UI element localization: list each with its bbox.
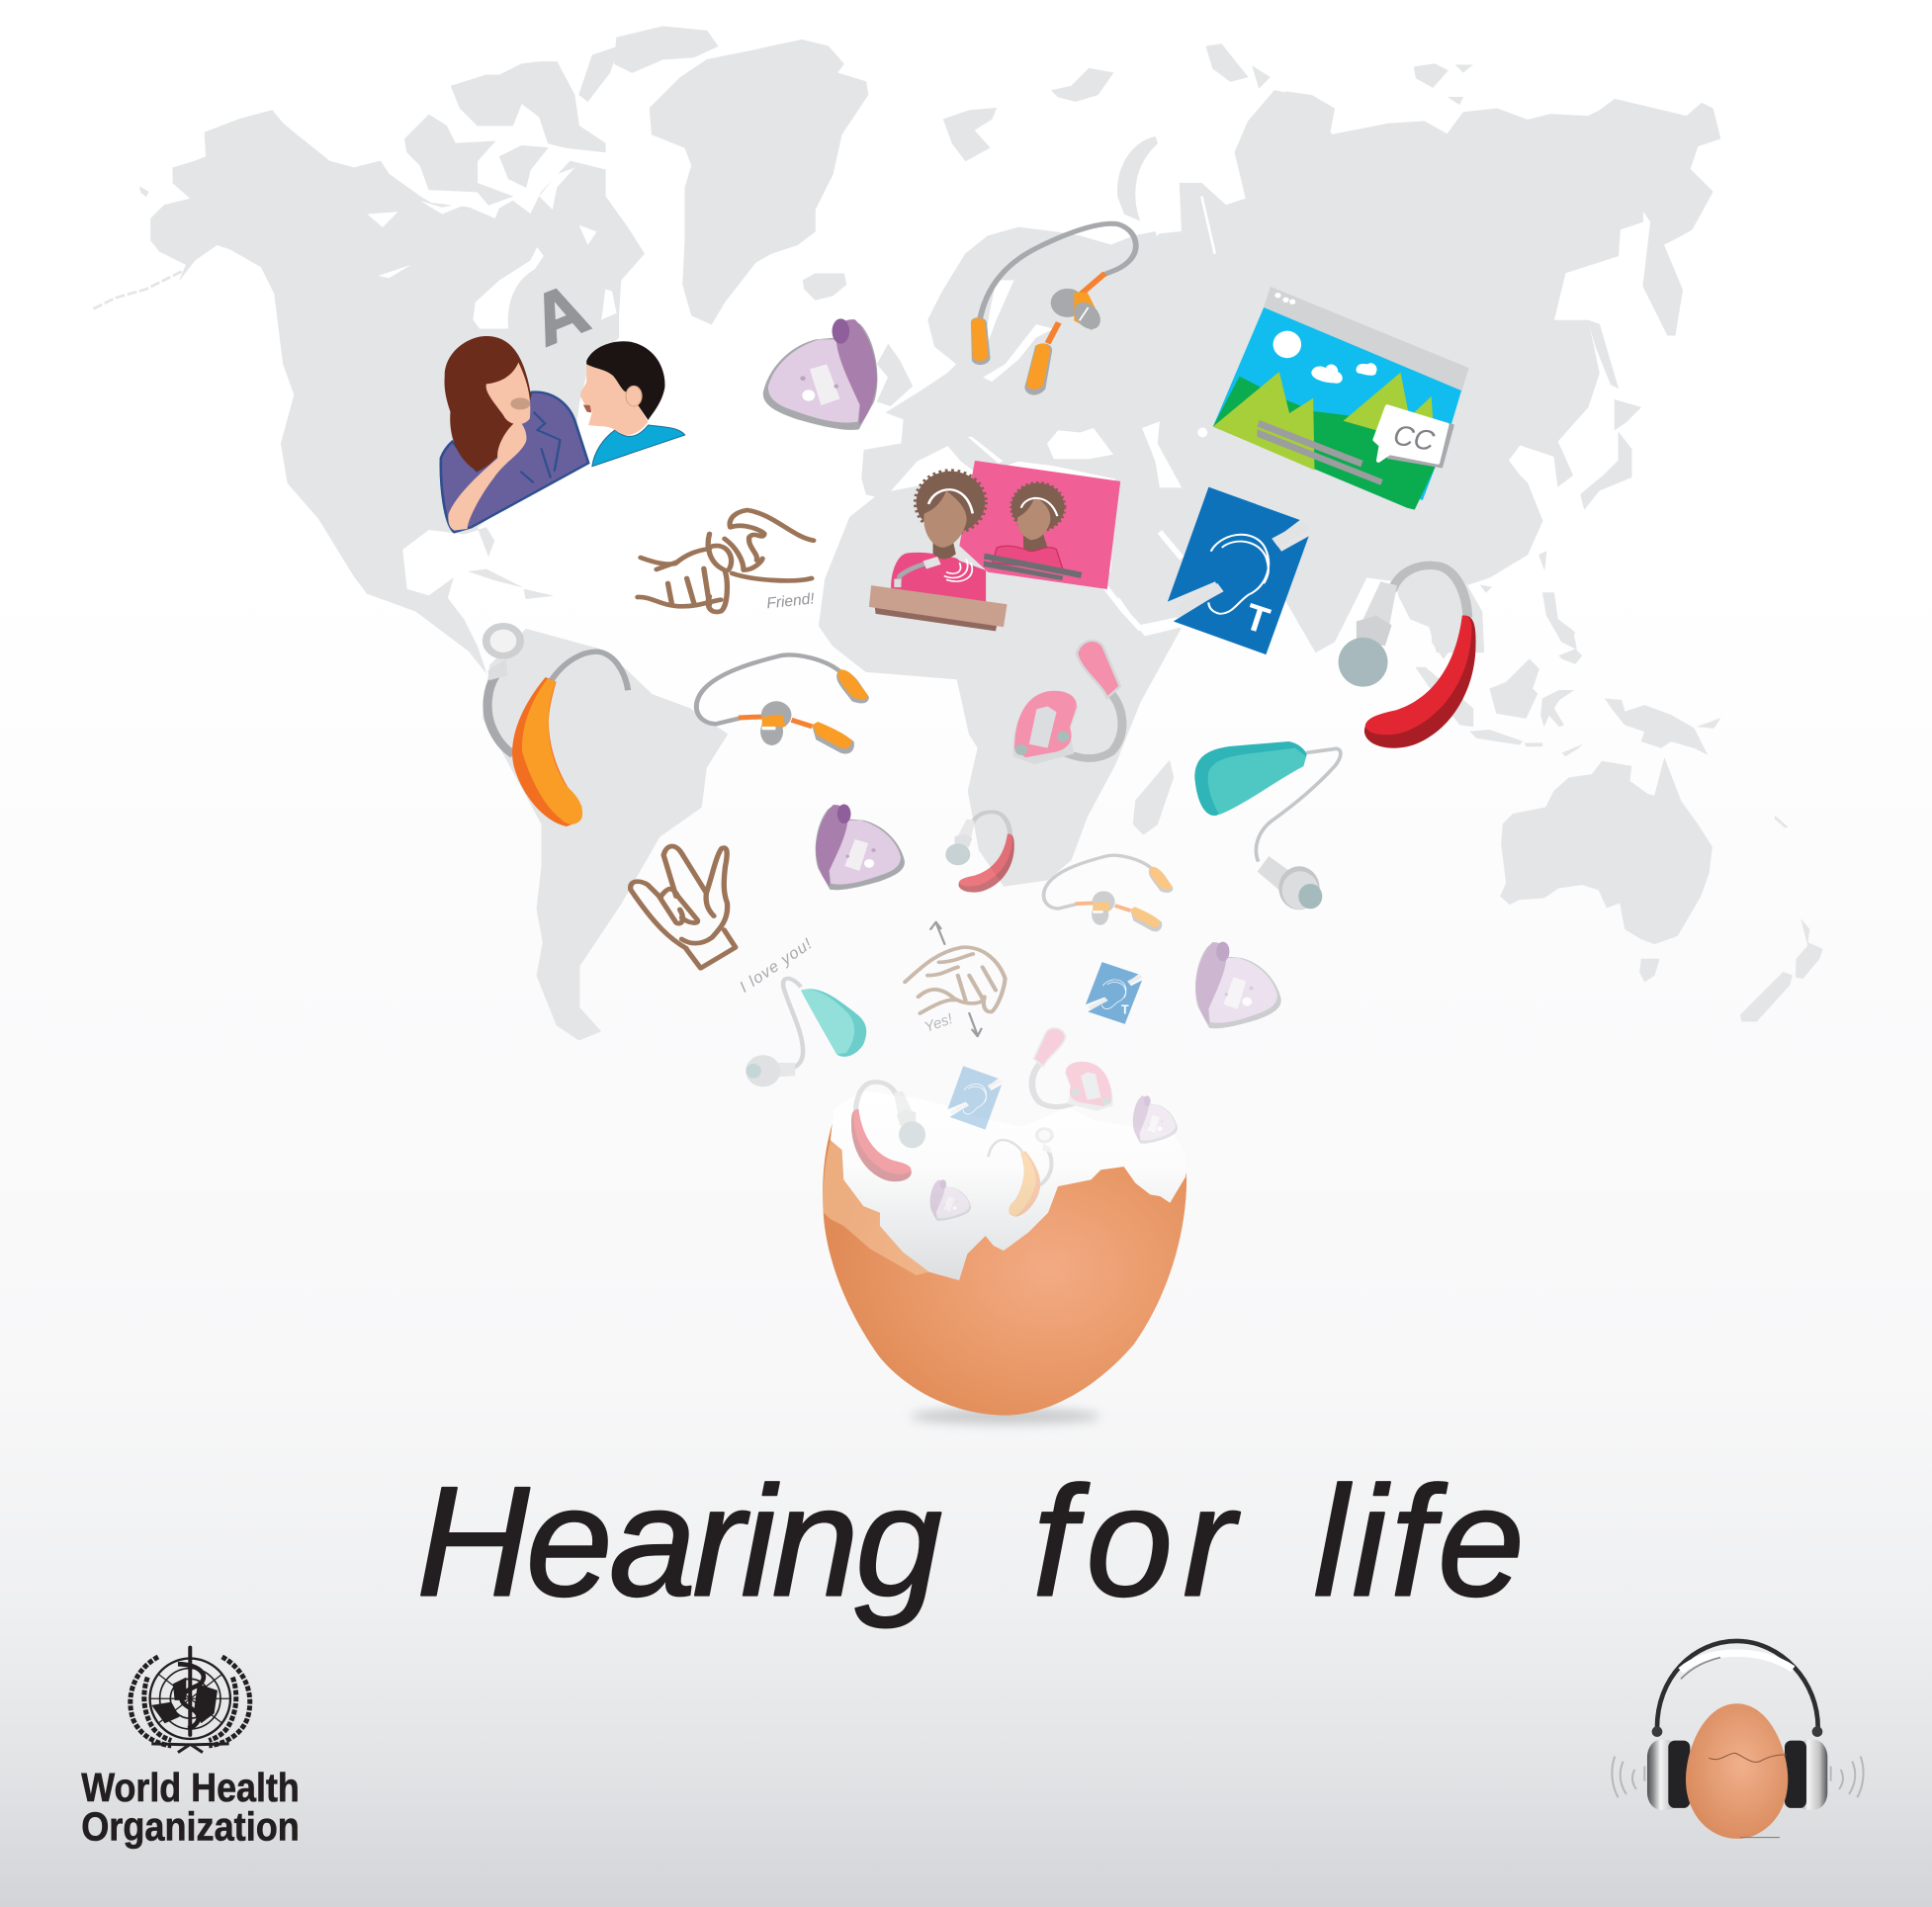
text: World Health Organization: World Health — [81, 1765, 300, 1810]
sound waves — [1612, 1757, 1864, 1797]
map: Africa — [820, 482, 1181, 886]
icon: pink behind-the-ear aid — [1013, 641, 1122, 764]
icon group: hearing-loss communication — [441, 269, 685, 532]
emblem — [131, 1648, 250, 1753]
icon: sign language 'Yes' fist — [905, 922, 1006, 1036]
icon: faded red aid over Africa — [945, 812, 1014, 893]
map: East Asia — [1209, 64, 1720, 652]
world map — [93, 27, 1822, 1040]
icon: egg shell — [823, 1090, 1186, 1425]
egg lower shell — [823, 1124, 1186, 1416]
WHO logo — [81, 1648, 300, 1850]
title: Hearing — [416, 1454, 941, 1629]
text: Yes!: Yes! — [922, 1010, 955, 1036]
icon: faded teal aid — [746, 979, 866, 1086]
text: CC: CC — [1391, 419, 1437, 458]
headband — [1657, 1641, 1818, 1730]
icon: speaker with live screen — [869, 461, 1120, 631]
map: Europe and western Asia — [803, 44, 1463, 627]
icon: teal receiver-in-canal aid — [1194, 741, 1341, 910]
title: for — [1032, 1454, 1245, 1629]
ear cups — [1647, 1740, 1680, 1810]
icon: egg with headphones — [1612, 1641, 1864, 1839]
icon: sign language 'Friend' — [638, 510, 816, 612]
icon: woman and boy talking — [441, 336, 685, 532]
title: life — [1313, 1454, 1529, 1629]
icon: letter A: A — [521, 269, 599, 362]
small egg — [1686, 1703, 1788, 1839]
egg inner white — [831, 1090, 1186, 1280]
map: Oceania and Southeast Asia — [1416, 613, 1822, 1021]
text: World Health Organization — [81, 1765, 300, 1850]
icon: bone-conduction headset (Atlantic) — [696, 654, 869, 753]
icon: faded telecoil sign — [1086, 962, 1142, 1024]
icon: faded in-the-ear aid (right) — [1195, 942, 1281, 1028]
icon: in-the-ear aid purple (middle) — [816, 805, 905, 890]
text: T: T — [1240, 595, 1274, 642]
icon: orange behind-the-ear aid — [486, 626, 628, 826]
icon: faded aids rising from egg — [851, 1028, 1178, 1221]
text: World Health Organization: Organization — [81, 1804, 300, 1850]
icon: in-the-ear aid purple (top) — [763, 318, 877, 430]
icon: sign language 'I love you' hand — [631, 846, 816, 997]
map: South America — [483, 630, 727, 1040]
icon: telecoil hearing loop sign — [1168, 487, 1309, 654]
icon: faded bone-conduction headset — [1044, 855, 1173, 931]
map: Greenland — [650, 40, 868, 324]
icon: bone-conduction headset (Europe) — [971, 223, 1136, 394]
text: I love you!: I love you! — [737, 934, 816, 997]
map: North America and Arctic — [93, 27, 868, 673]
text: Friend!: Friend! — [766, 590, 816, 612]
text: small T: T — [1121, 1003, 1129, 1017]
icon: red behind-the-ear aid — [1339, 565, 1476, 748]
map: seas and lakes — [367, 168, 1215, 628]
egg left highlight — [823, 1140, 929, 1275]
icon: captioned video window — [1213, 287, 1469, 510]
